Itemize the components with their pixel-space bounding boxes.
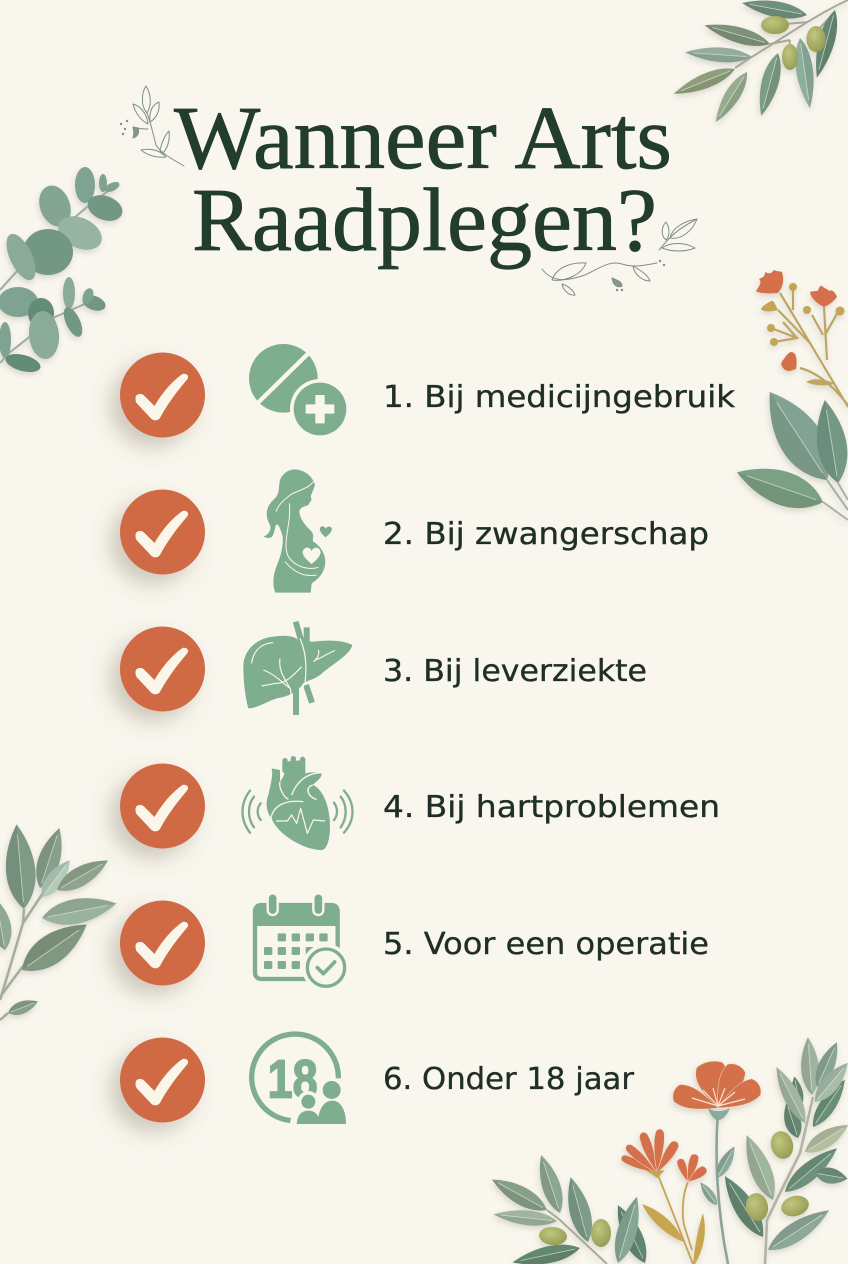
row 6 [120,1034,635,1127]
title [174,89,672,270]
check badge [120,626,205,712]
orange flowers [620,1059,764,1264]
label: 2. Bij zwangerschap [383,517,709,552]
label: 3. Bij leverziekte [383,654,647,689]
left olive sprig [488,1152,654,1264]
label: 1. Bij medicijngebruik [383,380,736,415]
label: 4. Bij hartproblemen [383,790,720,825]
row 4 [120,759,720,850]
row 2 [120,469,709,593]
decoration: sage sprig lower left [0,823,119,1020]
ornament: sprigs right of title [542,219,697,295]
decoration: plants bottom right [488,1037,848,1264]
icon: pill and plus [249,344,350,439]
check badge [120,900,205,986]
check badge [120,352,205,438]
ornament: sprig left of title [120,86,184,166]
decoration: eucalyptus left [0,167,126,375]
label: 6. Onder 18 jaar [383,1062,635,1097]
check badge [120,1038,205,1122]
icon: 18 years and people: 18 [268,1050,318,1109]
icon: 18 years and people [252,1034,347,1127]
label: 5. Voor een operatie [383,927,709,962]
icon: calendar with check [253,893,350,992]
title: Raadplegen? [192,171,657,270]
icon: liver [243,622,352,715]
icon: heart with pulse [242,759,352,850]
check badge [120,490,205,574]
right olive sprig [716,1037,848,1264]
row 1 [120,344,736,439]
icon: pregnant woman [263,469,332,593]
decoration: flowers and leaves right [731,270,848,520]
decoration: olive branch top right [671,0,848,126]
row 5 [120,893,709,992]
check badge [120,764,205,848]
title: Wanneer Arts [174,89,672,188]
row 3 [120,622,647,715]
